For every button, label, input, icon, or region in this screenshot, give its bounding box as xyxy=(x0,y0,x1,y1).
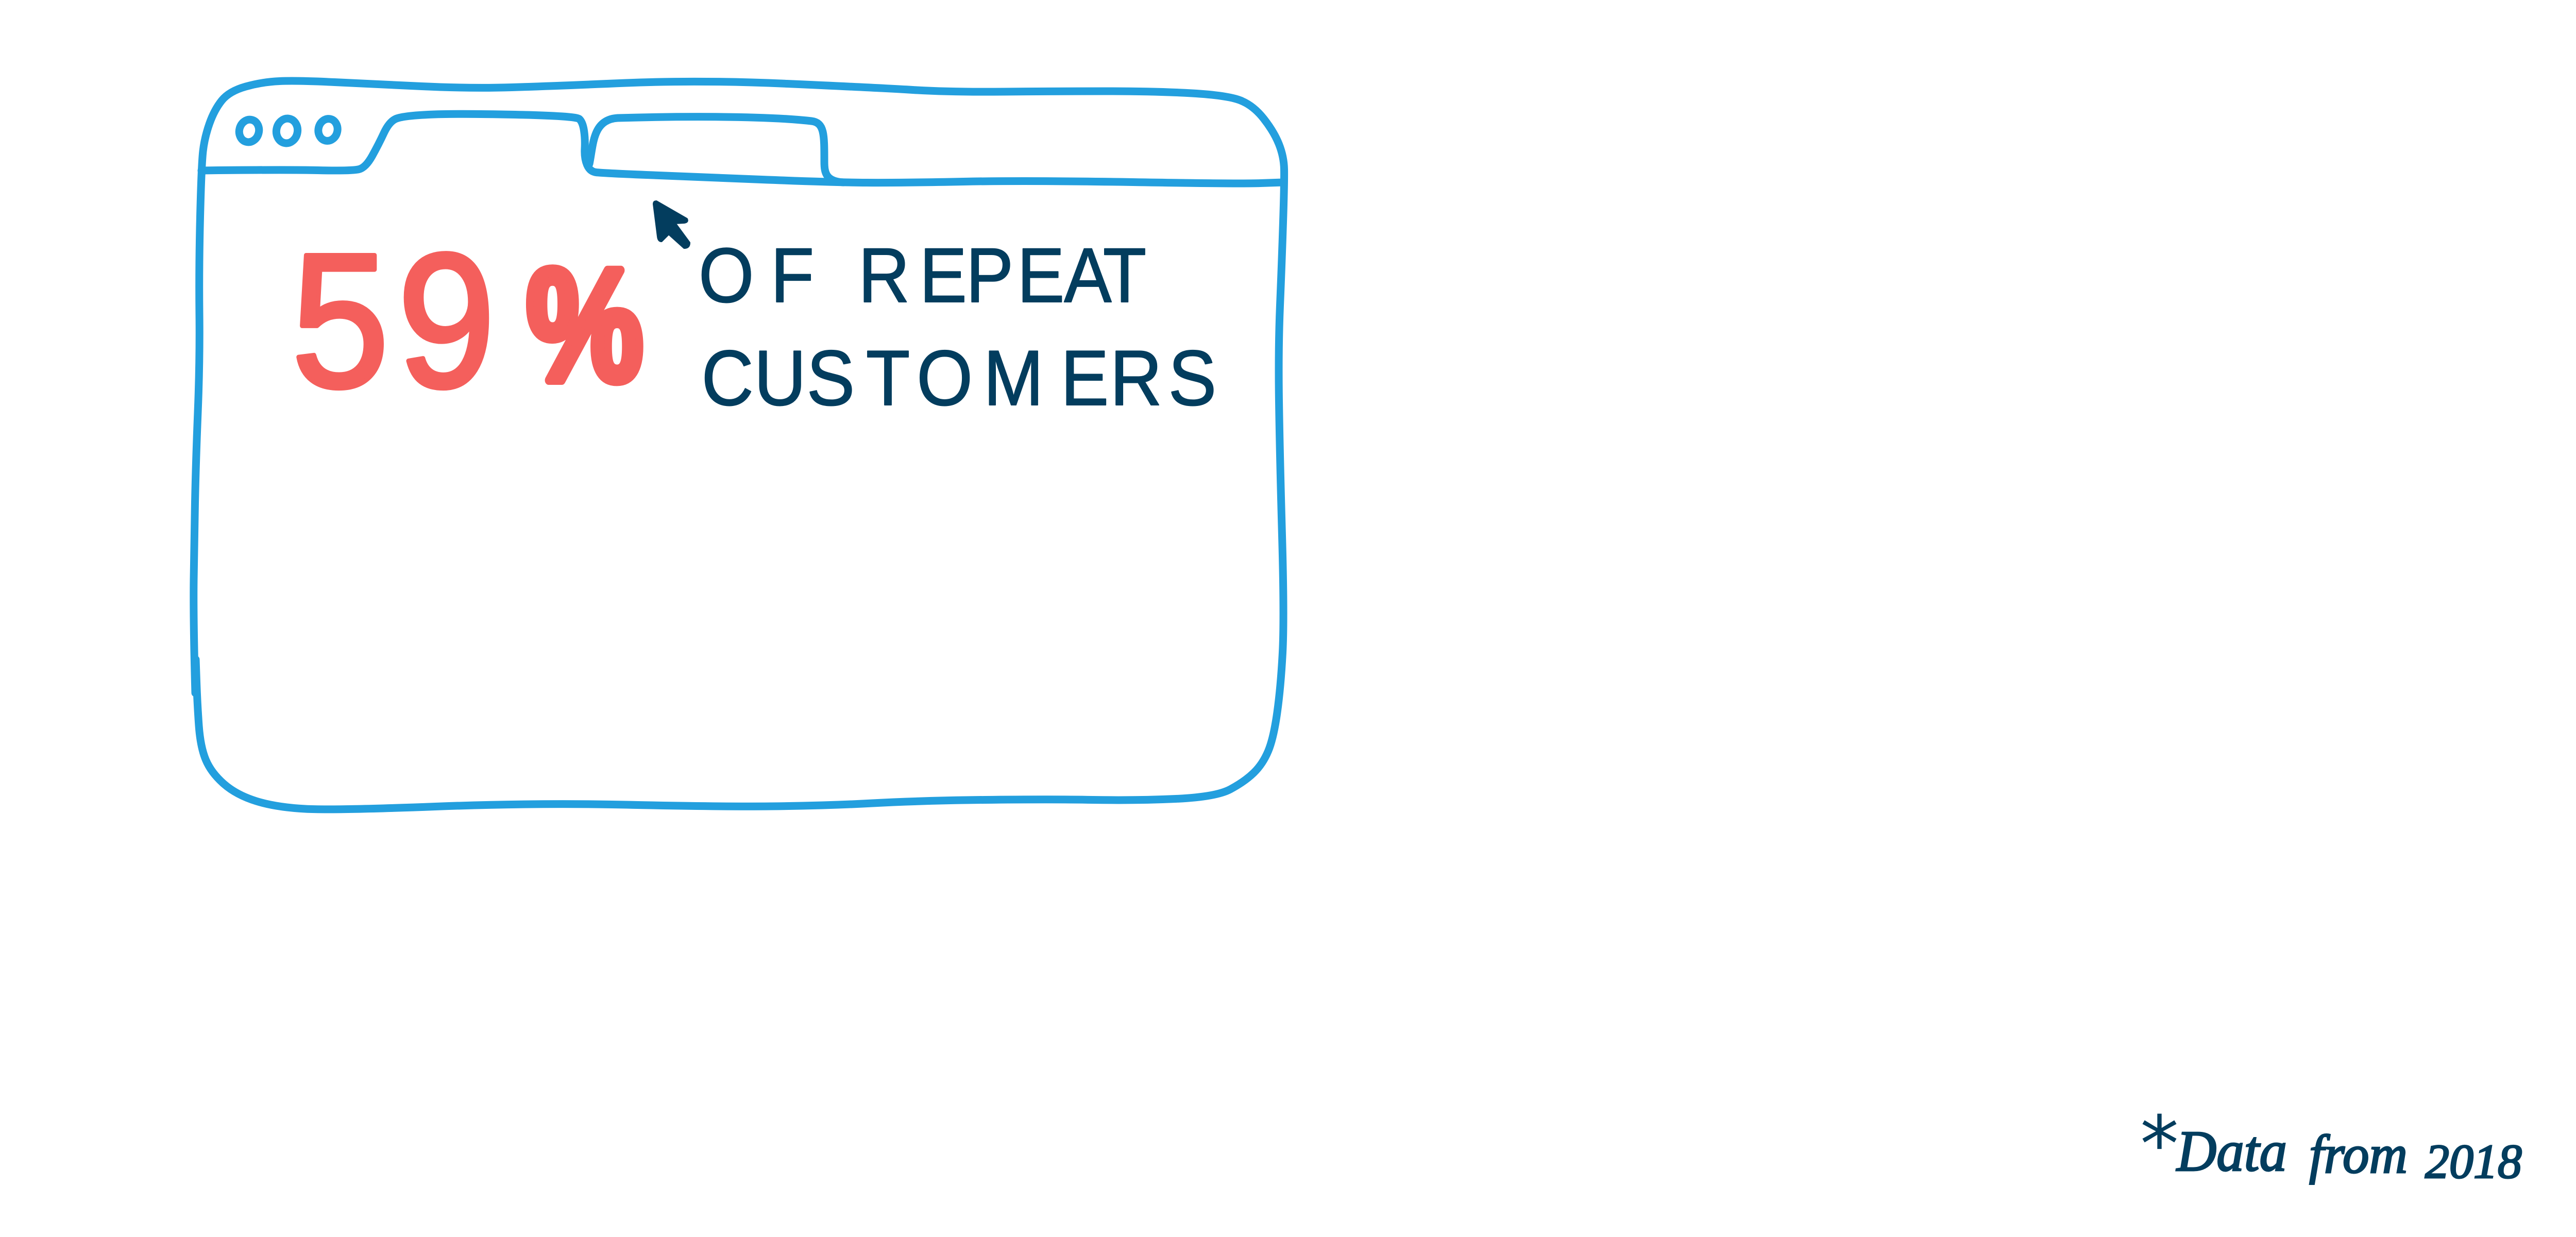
footnote: data from 2018: 2018 xyxy=(2425,1135,2522,1189)
statistic: 59 percent xyxy=(292,214,643,427)
footnote: data from 2018: from xyxy=(2309,1124,2408,1184)
window control dots xyxy=(236,117,340,145)
active tab and toolbar line xyxy=(201,114,1283,183)
second tab xyxy=(589,117,843,182)
browser window illustration xyxy=(194,81,1284,809)
text: of repeat customers: CUSTOMERS xyxy=(702,334,1216,421)
footnote: data from 2018 xyxy=(2140,1100,2522,1190)
statistic: 59 percent: % xyxy=(527,236,643,415)
footnote: data from 2018: * xyxy=(2140,1100,2179,1190)
icon: mouse cursor arrow xyxy=(654,201,689,248)
window outline xyxy=(194,81,1284,809)
text: of repeat customers xyxy=(699,232,1216,421)
footnote: data from 2018: Data xyxy=(2176,1120,2287,1183)
text: of repeat customers: OF REPEAT xyxy=(699,232,1146,318)
statistic: 59 percent: 59 xyxy=(292,214,495,427)
